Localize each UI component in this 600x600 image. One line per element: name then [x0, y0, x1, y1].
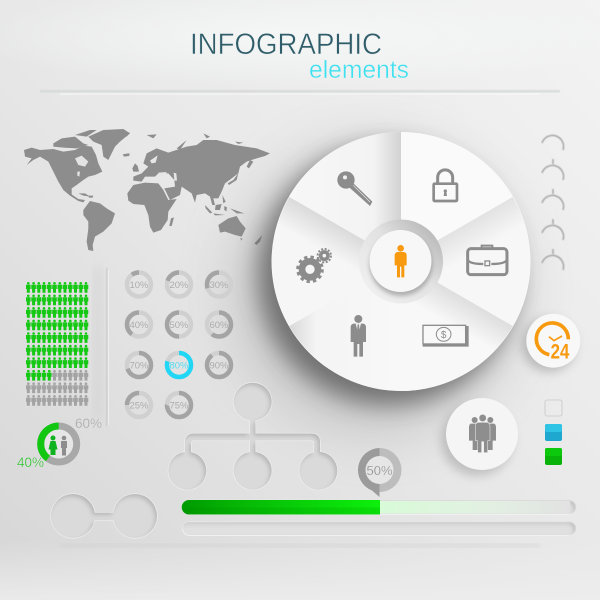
- connected circles cutout: [51, 494, 157, 538]
- legend swatches: [545, 400, 562, 465]
- panel: wheel: [258, 132, 530, 405]
- gender ratio donut: 60%: [75, 416, 102, 431]
- icon: lock: [434, 170, 457, 201]
- empty bar: [182, 522, 576, 536]
- percentage donuts: 90%: [209, 360, 229, 372]
- eurasia africa oceania: [125, 133, 270, 245]
- percentage donuts: 30%: [209, 280, 229, 291]
- wheel icons: [298, 170, 507, 357]
- icon: gears: [298, 249, 331, 282]
- percentage donuts: 80%: [169, 360, 189, 372]
- gender ratio donut: 40%: [17, 455, 44, 470]
- center disc: [370, 230, 432, 292]
- 50% bubble: 50%: [366, 463, 393, 478]
- percentage donuts: 40%: [129, 320, 149, 331]
- percentage donuts: 50%: [169, 320, 189, 331]
- 50% bubble: [358, 448, 402, 497]
- clock 24 badge: [522, 314, 580, 372]
- icon: money: [423, 325, 469, 347]
- icon: businessman: [351, 315, 366, 357]
- people badge: [441, 398, 518, 476]
- gender ratio donut: [17, 416, 102, 470]
- center ring: [359, 220, 443, 304]
- americas: [24, 129, 130, 251]
- percentage donuts: 25%: [129, 400, 149, 412]
- icon: key: [337, 171, 372, 206]
- progress bar: [182, 500, 576, 514]
- people percentage grid: [26, 282, 88, 406]
- wedges: [272, 132, 530, 391]
- icon: money: $: [441, 330, 447, 341]
- percentage donuts: 10%: [129, 280, 149, 291]
- icon: briefcase: [468, 246, 507, 275]
- title: elements: [309, 56, 409, 84]
- percentage donuts: [127, 272, 231, 417]
- percentage donuts: 70%: [129, 360, 149, 372]
- percentage donuts: 75%: [169, 400, 189, 412]
- hook arcs: [542, 135, 564, 270]
- title: INFOGRAPHIC: [190, 28, 382, 61]
- icon: group of people: [469, 414, 496, 453]
- female icon: [48, 436, 58, 455]
- icon: orange person: [395, 245, 407, 277]
- title: [190, 28, 409, 84]
- icon: clock: 24: [551, 340, 569, 364]
- percentage donuts: 20%: [169, 280, 189, 291]
- hierarchy cutout: [168, 383, 337, 490]
- world map: [24, 129, 270, 251]
- percentage donuts: 60%: [209, 320, 229, 331]
- male icon: [61, 436, 67, 456]
